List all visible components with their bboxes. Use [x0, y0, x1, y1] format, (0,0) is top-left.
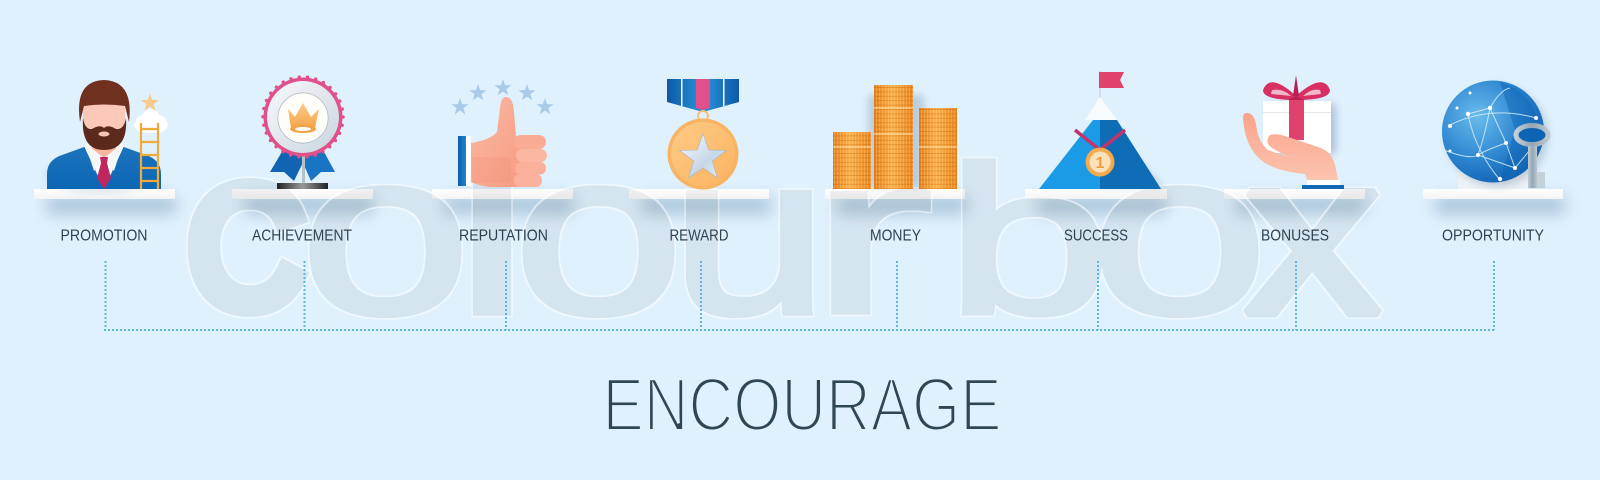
dotted connector	[104, 261, 1495, 330]
item: reputation	[451, 79, 554, 244]
label: REWARD: REWARD	[670, 228, 728, 244]
watermark: Colourbox: o	[300, 103, 471, 363]
shelf shadows	[46, 196, 1565, 214]
icon: five stars	[451, 79, 554, 114]
item: success	[1039, 71, 1164, 244]
watermark: Colourbox: o	[513, 103, 684, 363]
label: ACHIEVEMENT: ACHIEVEMENT	[252, 228, 352, 244]
icon: hand holding gift	[1243, 75, 1344, 189]
watermark: Colourbox: o	[1091, 103, 1268, 362]
watermark: Colourbox: u	[671, 108, 828, 362]
icon: mountain with flag and medal	[1039, 71, 1164, 189]
item: achievement	[252, 77, 352, 244]
watermark: Colourbox	[188, 103, 1381, 363]
item: opportunity	[1442, 80, 1548, 244]
icon: medal	[667, 79, 739, 190]
label: SUCCESS: SUCCESS	[1064, 228, 1128, 244]
watermark: Colourbox: x	[1244, 108, 1381, 362]
icon: coin stacks	[833, 85, 957, 189]
item: reward	[667, 79, 739, 244]
label: MONEY: MONEY	[870, 228, 921, 244]
item: promotion	[45, 80, 168, 244]
label: BONUSES: BONUSES	[1261, 228, 1329, 244]
title: ENCOURAGE: ENCOURAGE	[602, 362, 1002, 446]
shelves	[34, 189, 1563, 199]
label: OPPORTUNITY: OPPORTUNITY	[1442, 228, 1544, 244]
icon: thumbs up	[458, 97, 547, 187]
item: money	[833, 85, 957, 244]
watermark: Colourbox: b	[946, 124, 1111, 358]
icon: businessman with ladder	[45, 80, 168, 193]
watermark: Colourbox: r	[808, 107, 934, 362]
label: PROMOTION: PROMOTION	[60, 228, 148, 244]
icon: globe with key	[1442, 80, 1548, 189]
watermark: Colourbox: C	[188, 153, 304, 342]
label: REPUTATION: REPUTATION	[459, 228, 548, 244]
item: bonuses	[1243, 75, 1344, 244]
icon: mountain with flag and medal: 1	[1096, 155, 1105, 172]
watermark: Colourbox: l	[454, 123, 530, 358]
icon: rosette with crown	[263, 77, 343, 189]
